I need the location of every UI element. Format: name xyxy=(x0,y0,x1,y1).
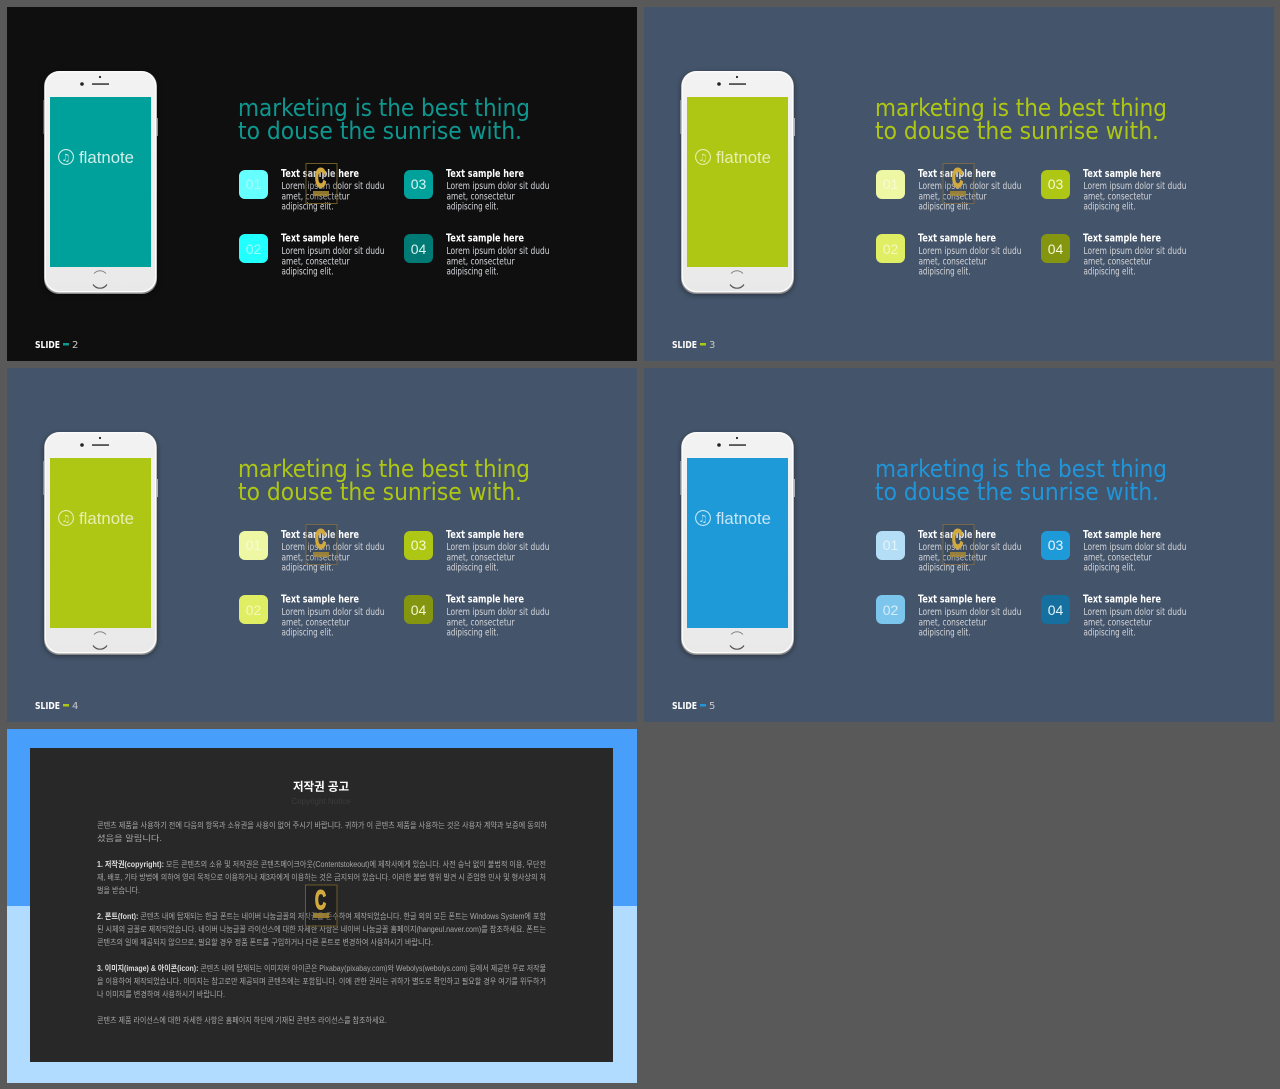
title: copyright notice: 저작권 공고 xyxy=(293,780,349,794)
item 04: adipiscing elit. xyxy=(1084,266,1136,278)
icon: phone mockup: ♫ xyxy=(699,514,707,525)
text block: image and icon: 나 이미지를 변경하여 사용하시기 바랍니다. xyxy=(97,989,225,999)
item 03: Lorem ipsum dolor sit dudu xyxy=(1084,181,1186,192)
watermark xyxy=(943,524,974,564)
item 01: Text sample here xyxy=(281,168,359,180)
footer: slide number: 3 xyxy=(709,340,715,351)
footer: slide number: 5 xyxy=(709,701,715,712)
item 02: adipiscing elit. xyxy=(918,266,970,278)
watermark xyxy=(943,163,974,204)
item 02: Text sample here xyxy=(918,594,996,606)
item 02: 02 xyxy=(883,241,898,257)
item 02: 02 xyxy=(883,602,898,618)
item 02: amet, consectetur xyxy=(918,256,987,268)
heading: to douse the sunrise with. xyxy=(875,117,1159,145)
item 04: Lorem ipsum dolor sit dudu xyxy=(446,246,550,257)
item 03: 03 xyxy=(411,176,426,192)
item 03: amet, consectetur xyxy=(446,192,515,202)
footer: slide number: SLIDE xyxy=(35,701,60,712)
text block: image and icon xyxy=(97,963,546,999)
item 02: Lorem ipsum dolor sit dudu xyxy=(282,246,384,257)
text block: image and icon: 을 이용하여 제작되었습니다. 이미지는 참고로만 제공되며 콘텐츠에는 포함됩니다. 이에 관한 권리는 귀하가 별도로 확인하고 필요할 경우 여기를 위두하거 xyxy=(97,976,546,986)
watermark xyxy=(306,163,337,204)
text block: copyright: 1. 저작권(copyright): 모든 콘텐츠의 소유 및 저작권은 콘텐츠메이크아웃(Contentstokeout)에 제작사에게 있습니다. 사전 승낙 없이 불법적 이용, 무단전 xyxy=(97,859,546,869)
item 02: amet, consectetur xyxy=(282,256,350,268)
slide 3: slate green phone slide xyxy=(7,368,637,722)
item 02: Text sample here xyxy=(918,232,996,244)
watermark xyxy=(306,524,337,564)
item 03: adipiscing elit. xyxy=(1084,202,1136,212)
item 04: 04 xyxy=(411,602,426,618)
watermark: C xyxy=(952,524,963,554)
item 04: Text sample here xyxy=(1083,594,1161,606)
heading: to douse the sunrise with. xyxy=(238,478,522,506)
item 03: Lorem ipsum dolor sit dudu xyxy=(446,181,550,192)
item 01: Lorem ipsum dolor sit dudu xyxy=(918,181,1022,192)
text block: intro: 콘텐츠 제품을 사용하기 전에 다음의 항목과 소유권을 사용이 없어 주시기 바랍니다. 귀하가 이 콘텐츠 제품을 사용하는 것은 사용자 계약과 보증에 동의하 xyxy=(97,820,548,830)
item 02: Text sample here xyxy=(281,594,359,606)
item 04: 04 xyxy=(411,241,426,257)
text block: font: 된 시체의 글꼴로 제작되었습니다. 네이버 나눔글꼴 라이선스에 대한 자세한 사항은 네이버 나눔글꼴 홈페이지(hangeul.naver.com)를 참조하세요. 폰트는 xyxy=(97,924,546,934)
item 01 xyxy=(239,529,384,574)
item 02 xyxy=(876,594,1022,638)
heading: marketing is the best thing xyxy=(875,455,1167,483)
text block: intro xyxy=(97,820,548,843)
item 04: Text sample here xyxy=(446,232,524,244)
item 03: Lorem ipsum dolor sit dudu xyxy=(1084,542,1186,553)
item 04: 04 xyxy=(1048,602,1063,618)
heading: to douse the sunrise with. xyxy=(238,117,522,145)
item 03 xyxy=(1041,168,1186,212)
icon: phone mockup: ♫ xyxy=(62,514,70,525)
item 01: Text sample here xyxy=(918,168,996,180)
item 02: amet, consectetur xyxy=(282,618,350,628)
item 01: 01 xyxy=(883,176,898,192)
item 03: 03 xyxy=(1048,176,1063,192)
text block: copyright xyxy=(97,859,546,895)
icon: phone mockup: flatnote xyxy=(716,509,771,528)
text block: license: 콘텐츠 제품 라이선스에 대한 자세한 사항은 홈페이지 하단에 기재된 콘텐츠 라이선스를 참조하세요. xyxy=(97,1015,387,1025)
heading: marketing is the best thing xyxy=(238,94,530,122)
icon: phone mockup xyxy=(44,432,158,656)
icon: phone mockup xyxy=(44,71,158,295)
item 03: amet, consectetur xyxy=(1084,192,1152,202)
item 01: adipiscing elit. xyxy=(282,562,334,574)
heading xyxy=(875,455,1167,506)
item 01: Text sample here xyxy=(918,529,996,541)
slide 5: copyright notice xyxy=(7,729,637,1083)
item 03: amet, consectetur xyxy=(1084,552,1152,564)
slide 4: slate blue phone slide xyxy=(644,368,1274,722)
item 04 xyxy=(1041,594,1186,638)
item 02 xyxy=(239,232,384,278)
item 02 xyxy=(876,232,1022,278)
item 01: Lorem ipsum dolor sit dudu xyxy=(282,181,384,192)
item 01: Text sample here xyxy=(281,529,359,541)
slide 1: black teal phone slide xyxy=(7,7,637,361)
text block: intro: 셨음을 알립니다. xyxy=(97,833,162,843)
item 04: amet, consectetur xyxy=(1084,618,1152,628)
icon: phone mockup: flatnote xyxy=(79,148,134,167)
footer: slide number: 2 xyxy=(72,340,78,351)
item 02: adipiscing elit. xyxy=(282,628,334,638)
text block: font xyxy=(97,911,547,947)
item 03: adipiscing elit. xyxy=(446,202,498,212)
watermark: C xyxy=(952,163,963,193)
item 01: amet, consectetur xyxy=(918,192,987,202)
item 04: amet, consectetur xyxy=(446,618,515,628)
item 04: Text sample here xyxy=(1083,232,1161,244)
item 04: amet, consectetur xyxy=(1084,256,1152,268)
item 04 xyxy=(1041,232,1186,278)
item 03: 03 xyxy=(411,537,426,553)
item 01: 01 xyxy=(246,537,261,553)
item 01: Lorem ipsum dolor sit dudu xyxy=(282,542,384,553)
item 04: 04 xyxy=(1048,241,1063,257)
item 01: adipiscing elit. xyxy=(918,562,970,574)
item 01: amet, consectetur xyxy=(918,552,987,564)
item 03: Lorem ipsum dolor sit dudu xyxy=(446,542,550,553)
item 03: 03 xyxy=(1048,537,1063,553)
item 02: 02 xyxy=(246,241,261,257)
icon: phone mockup: flatnote xyxy=(79,509,134,528)
item 04: Lorem ipsum dolor sit dudu xyxy=(1084,607,1186,618)
item 03: Text sample here xyxy=(446,168,524,180)
icon: phone mockup xyxy=(680,432,795,656)
item 03 xyxy=(1041,529,1186,574)
item 01: amet, consectetur xyxy=(282,192,350,202)
item 03: adipiscing elit. xyxy=(1084,562,1136,574)
text block: font: 콘텐츠의 일에 제공되지 않으므로, 필요할 경우 정품 폰트를 구입하거나 다른 폰트로 변경하여 사용하시기 바랍니다. xyxy=(97,937,433,947)
item 02: Lorem ipsum dolor sit dudu xyxy=(918,246,1022,257)
watermark xyxy=(306,885,337,926)
item 02: Text sample here xyxy=(281,232,359,244)
item 04: Lorem ipsum dolor sit dudu xyxy=(446,607,550,618)
heading: marketing is the best thing xyxy=(238,455,530,483)
icon: phone mockup: flatnote xyxy=(716,148,771,167)
text block: copyright: 재, 배포, 기타 방법에 의하여 영리 목적으로 이용하거나 제3자에게 이용하는 것은 금지되어 있습니다. 이러한 불법 행위 발견 시 준엄한 민사 및 형사상의 처 xyxy=(97,872,546,882)
item 01 xyxy=(876,168,1022,212)
item 01: 01 xyxy=(883,537,898,553)
item 01: adipiscing elit. xyxy=(282,202,334,212)
item 03: adipiscing elit. xyxy=(446,562,498,574)
icon: phone mockup: ♫ xyxy=(62,153,70,164)
item 02: Lorem ipsum dolor sit dudu xyxy=(918,607,1022,618)
slide 2: slate green phone slide xyxy=(644,7,1274,361)
item 04: Text sample here xyxy=(446,594,524,606)
footer: slide number: SLIDE xyxy=(672,701,697,712)
icon: phone mockup: ♫ xyxy=(699,153,707,164)
footer: slide number: SLIDE xyxy=(35,340,60,351)
item 03 xyxy=(404,529,550,574)
watermark: C xyxy=(315,524,326,554)
item 01: adipiscing elit. xyxy=(918,202,970,212)
footer: slide number: SLIDE xyxy=(672,340,697,351)
item 04 xyxy=(404,232,550,278)
text block: copyright: 벌을 받습니다. xyxy=(97,885,140,895)
heading: marketing is the best thing xyxy=(875,94,1167,122)
footer: slide number: 4 xyxy=(72,701,78,712)
subtitle: Copyright Notice xyxy=(291,797,351,806)
item 03 xyxy=(404,168,550,212)
item 02: Lorem ipsum dolor sit dudu xyxy=(282,607,384,618)
heading xyxy=(238,94,530,145)
text block: font: 2. 폰트(font): 콘텐츠 내에 탑재되는 한글 폰트는 네이버 나눔글꼴의 저작권을 준수하여 제작되었습니다. 한글 외의 모든 폰트는 Windows System에 포함 xyxy=(97,911,547,921)
item 02 xyxy=(239,594,384,638)
item 03: amet, consectetur xyxy=(446,552,515,564)
item 01 xyxy=(876,529,1022,574)
item 04: adipiscing elit. xyxy=(446,628,498,638)
heading: to douse the sunrise with. xyxy=(875,478,1159,506)
item 02: amet, consectetur xyxy=(918,618,987,628)
icon: phone mockup xyxy=(680,71,795,295)
watermark: C xyxy=(315,885,326,915)
item 01: amet, consectetur xyxy=(282,552,350,564)
item 04: adipiscing elit. xyxy=(446,266,498,278)
item 04 xyxy=(404,594,550,638)
item 03: Text sample here xyxy=(1083,168,1161,180)
item 03: Text sample here xyxy=(446,529,524,541)
item 04: Lorem ipsum dolor sit dudu xyxy=(1084,246,1186,257)
item 01: 01 xyxy=(246,176,261,192)
item 04: amet, consectetur xyxy=(446,256,515,268)
heading xyxy=(875,94,1167,145)
item 01 xyxy=(239,168,384,212)
item 02: adipiscing elit. xyxy=(918,628,970,638)
item 01: Lorem ipsum dolor sit dudu xyxy=(918,542,1022,553)
heading xyxy=(238,455,530,506)
text block: image and icon: 3. 이미지(image) & 아이콘(icon): 콘텐츠 내에 탑재되는 이미지와 아이콘은 Pixabay(pixabay.com)와 Webolys(webolys.com) 등에서 제공한 무료 저작물 xyxy=(97,963,546,973)
item 02: 02 xyxy=(246,602,261,618)
item 02: adipiscing elit. xyxy=(282,266,334,278)
watermark: C xyxy=(315,163,326,193)
item 03: Text sample here xyxy=(1083,529,1161,541)
item 04: adipiscing elit. xyxy=(1084,628,1136,638)
